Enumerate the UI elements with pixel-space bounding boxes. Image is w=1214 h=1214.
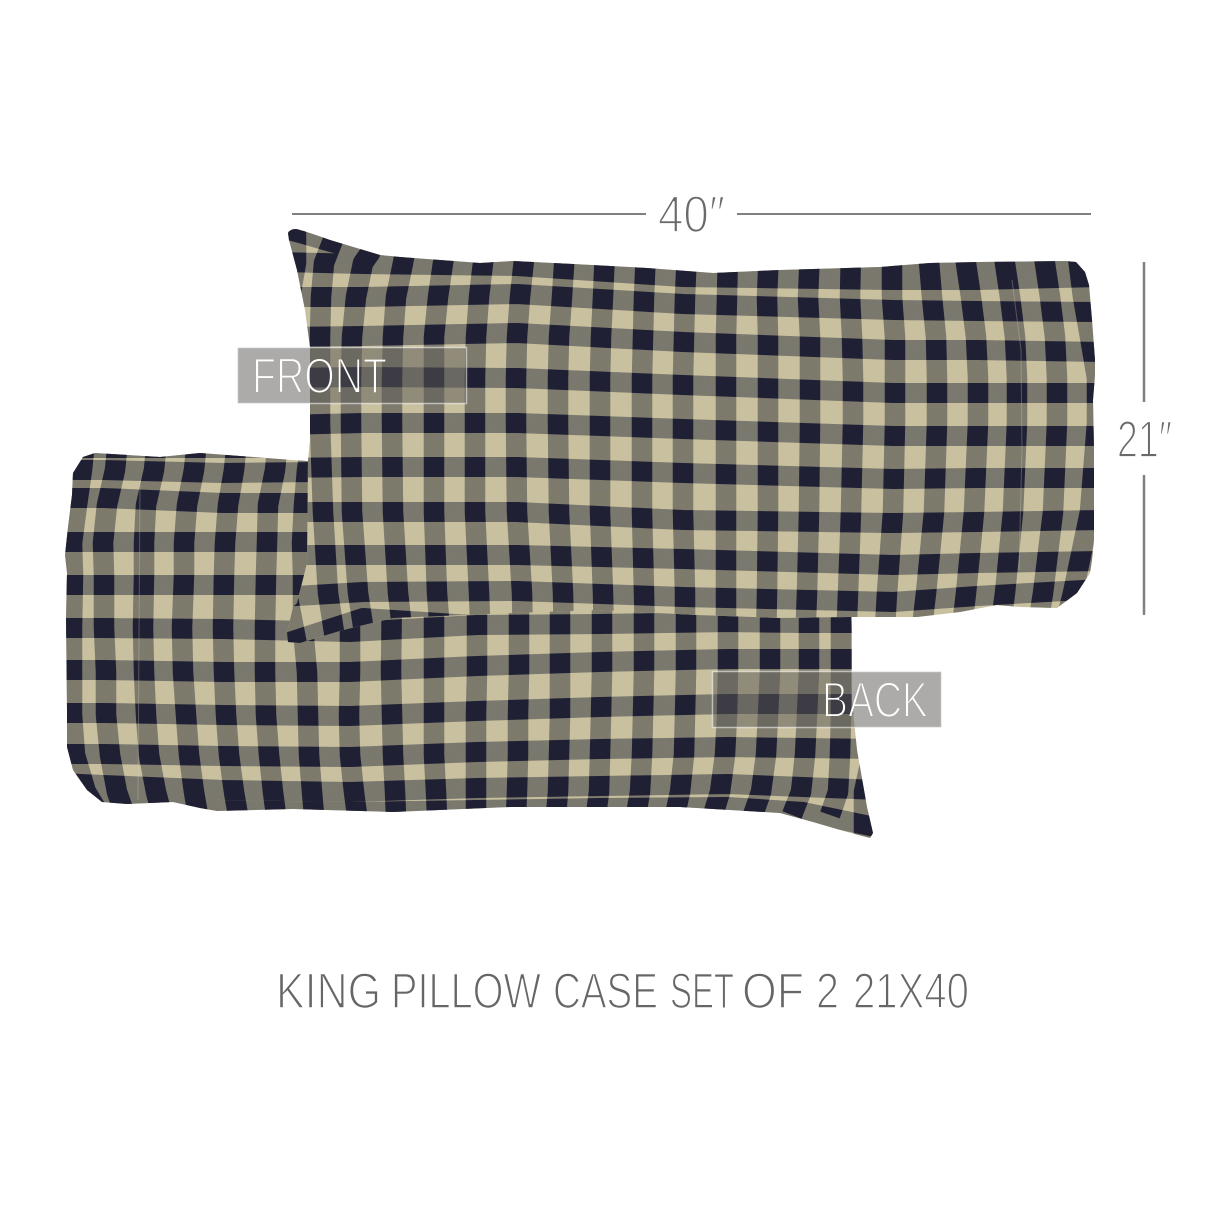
product title: PILLOW <box>391 963 542 1019</box>
product title: 2 <box>816 963 839 1019</box>
width dimension: 40 inches: 40″ <box>658 186 725 244</box>
product title: OF <box>742 963 804 1019</box>
back pillow case <box>50 440 890 850</box>
label: back: BACK <box>822 672 928 728</box>
front pillow case <box>279 225 1100 650</box>
product title: 21X40 <box>853 963 969 1019</box>
label: front: FRONT <box>252 348 387 404</box>
product title: CASE <box>553 963 658 1019</box>
product title: KING <box>276 963 381 1019</box>
height dimension: 21 inches: 21″ <box>1117 411 1172 469</box>
product title: SET <box>670 963 734 1019</box>
label: back <box>712 672 942 728</box>
product title <box>276 963 969 1019</box>
